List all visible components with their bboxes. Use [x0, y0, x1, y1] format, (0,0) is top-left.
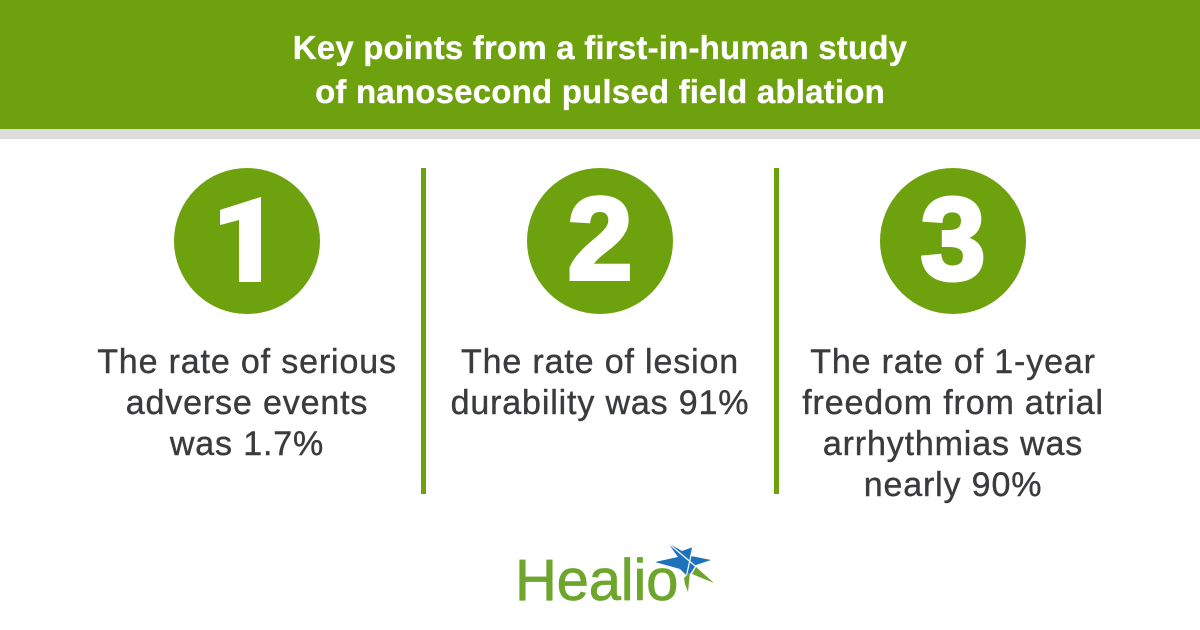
- number badge 3: [880, 168, 1026, 314]
- title: [293, 29, 907, 110]
- point 3 text: The rate of 1-year: [810, 343, 1096, 381]
- point 2 text: [451, 343, 749, 422]
- header band: [0, 0, 1200, 139]
- title: Key points from a first-in-human study: [293, 29, 907, 66]
- point 1 text: was 1.7%: [170, 425, 324, 463]
- number badge 3: 3: [920, 173, 986, 304]
- point 1 text: The rate of serious: [97, 343, 397, 381]
- point 3 text: freedom from atrial: [802, 384, 1104, 422]
- point 1 text: [97, 343, 397, 463]
- logo wordmark: Healio: [515, 548, 678, 613]
- Healio logo: [515, 544, 714, 613]
- number badge 2: [527, 168, 673, 314]
- logo star icon: [655, 544, 714, 592]
- number badge 1: 1: [214, 173, 280, 304]
- point 3 text: nearly 90%: [864, 466, 1042, 504]
- point 3 text: arrhythmias was: [823, 425, 1083, 463]
- point 1 text: adverse events: [126, 384, 368, 422]
- point 3 text: [802, 343, 1104, 504]
- number badge 2: 2: [567, 173, 633, 304]
- point 2 text: durability was 91%: [451, 384, 749, 422]
- number badge 1: [174, 168, 320, 314]
- title: of nanosecond pulsed field ablation: [315, 73, 885, 110]
- point 2 text: The rate of lesion: [461, 343, 739, 381]
